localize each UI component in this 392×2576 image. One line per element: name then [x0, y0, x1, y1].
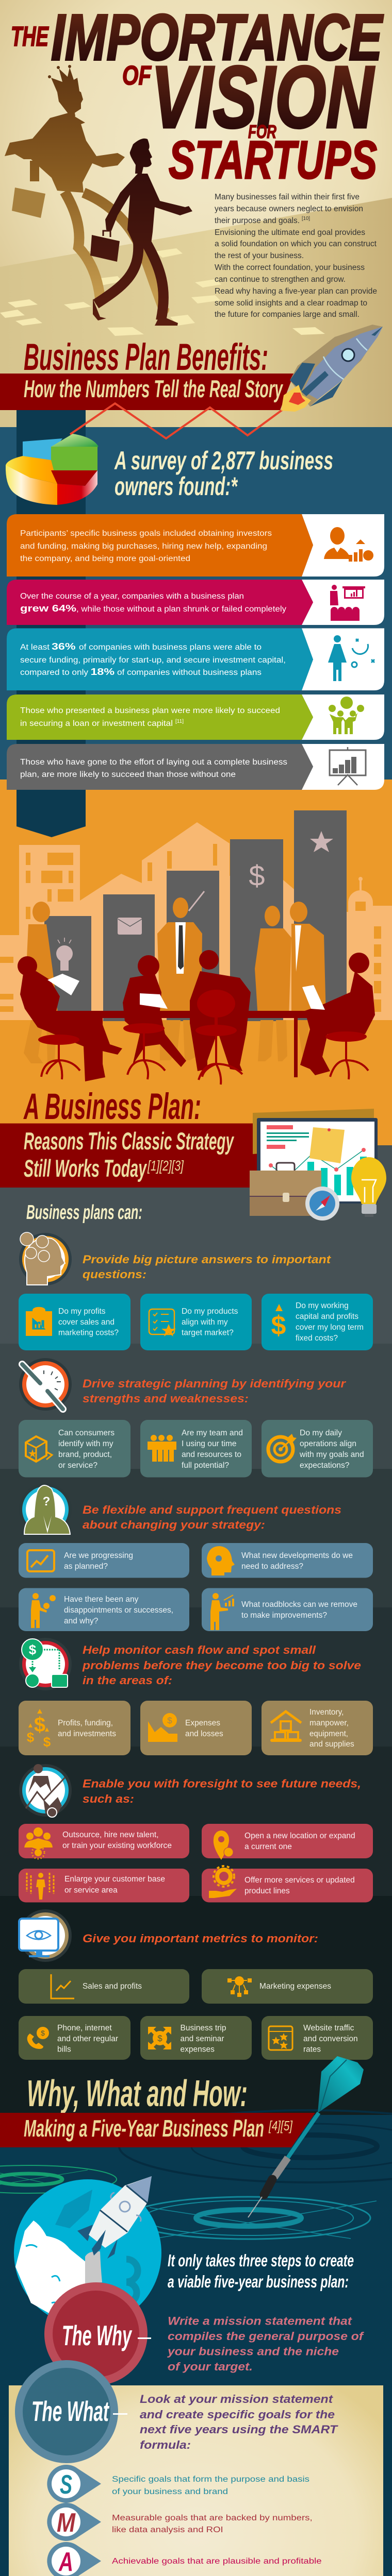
panel: monitor cards: and investments: [58, 1730, 116, 1738]
panel: future needs cards: or train your existing workforce: [62, 1841, 172, 1850]
heading: monitor cash flow: Help monitor cash flow and spot small: [83, 1643, 316, 1656]
panel: metrics cards: and other regular: [57, 2035, 118, 2043]
text block: intro: some solid insights and a clear roadmap to: [215, 299, 367, 308]
panel: question cards row 1: Do my working: [296, 1301, 349, 1310]
illustration: seated team at table: [18, 950, 375, 1084]
heading: big picture answers: questions:: [83, 1268, 146, 1281]
icon: cash flow diagram: $: [29, 1642, 37, 1657]
panel: future needs cards: [19, 1824, 373, 1902]
text: SMART definitions: [112, 2475, 350, 2576]
text block: intro: With the correct foundation, your business: [215, 263, 365, 272]
heading: metrics: Give you important metrics to monitor:: [83, 1932, 318, 1945]
panel: monitor cards: [19, 1701, 373, 1755]
panel: future needs cards: Open a new location or expand: [244, 1832, 355, 1840]
panel: survey finding loans: [7, 694, 384, 740]
panel: metrics cards: bills: [57, 2045, 71, 2054]
chart: gray bars with icons: [44, 810, 347, 1021]
panel: future needs cards: a current one: [244, 1842, 292, 1851]
text block: intro: their purpose and goals.: [215, 216, 300, 225]
panel: monitor cards: and losses: [185, 1730, 223, 1738]
circle: The Why: The Why: [62, 2319, 132, 2351]
heading band: Making a Five-Year Business Plan: [4][5]: [268, 2118, 293, 2133]
heading: Why, What and How: Why, What and How:: [27, 2073, 248, 2114]
text: SMART definitions: like data analysis and ROI: [112, 2526, 223, 2534]
heading: flexible strategy: about changing your strategy:: [83, 1518, 265, 1531]
icon: question-mark woman: [19, 1483, 72, 1536]
panel: question cards row 2: Do my daily: [300, 1429, 342, 1437]
text block: intro: Many businesses fail within their first five: [215, 193, 360, 201]
panel: question cards row 2: Can consumers: [58, 1429, 115, 1437]
panel: future needs cards: product lines: [244, 1887, 290, 1895]
panel: monitor cards: manpower,: [309, 1719, 349, 1727]
text block: the why: your business and the niche: [167, 2345, 339, 2358]
panel: metrics cards: $: [157, 2033, 162, 2043]
panel: survey finding grew 64%: grew 64%: [20, 603, 76, 614]
section background: slate gradient steps: [0, 1145, 392, 2115]
illustration: laptop, briefcase, compass, bulb: [250, 1109, 386, 1221]
panel: question cards row 1: fixed costs?: [296, 1334, 338, 1343]
section background: orange with skyline: [0, 779, 392, 1150]
panel: monitor cards: Expenses: [185, 1719, 220, 1727]
text block: the why: Write a mission statement that: [168, 2314, 353, 2328]
text: smart intro: [140, 2393, 338, 2451]
panel: question cards row 2: with my goals and: [299, 1450, 364, 1459]
icon: cash flow diagram: [19, 1638, 72, 1690]
text block: intro: a solid foundation on which you can construct: [215, 240, 377, 248]
icon: broken chain clock: [19, 1358, 72, 1411]
decor: teal target: [127, 2197, 377, 2239]
text block: the why: [167, 2314, 365, 2373]
text block: intro: the rest of your business.: [215, 251, 304, 260]
text block: intro: the future for companies large and small.: [215, 310, 360, 319]
panel: monitor cards: equipment,: [309, 1730, 348, 1738]
panel: question cards row 3: as planned?: [64, 1562, 108, 1571]
circle: The What: The What: [31, 2395, 110, 2427]
title: The Importance of Vision for Startups: FOR: [248, 121, 276, 142]
panel: survey finding loans: in securing a loan or investment capital: [20, 719, 173, 728]
illustration: globe with rocket: [14, 2176, 161, 2327]
heading: strategic planning: Drive strategic planning by identifying your: [83, 1377, 347, 1390]
panel: question cards row 1: target market?: [182, 1328, 234, 1337]
heading: Business plans can: Business plans can:: [26, 1201, 142, 1224]
heading band: Reasons This Classic Strategy: Still Works Today: [24, 1155, 148, 1182]
panel: survey finding 36% funding: 18%: [91, 667, 115, 677]
panel: question cards row 2: Are my team and: [182, 1429, 243, 1437]
decor: dark target: [119, 2110, 392, 2182]
panel: question cards row 3: What roadblocks can we remove: [241, 1600, 357, 1609]
icon: head with puzzle: [19, 1232, 72, 1285]
text: SMART definitions: Measurable goals that are backed by numbers,: [112, 2514, 313, 2522]
text block: intro: years because owners neglect to envision: [215, 205, 363, 213]
heading: big picture answers: [83, 1253, 332, 1281]
panel: question cards row 3: What new developments do we: [241, 1551, 353, 1560]
heading: foresight: Enable you with foresight to see future needs,: [83, 1777, 361, 1790]
panel: survey finding 36% funding: of companies with business plans were able to: [79, 643, 262, 652]
panel: question cards row 2: and resources to: [182, 1450, 241, 1459]
illustration: king shadow silhouette: [5, 65, 164, 310]
circle: The What: [15, 2360, 127, 2463]
panel: survey finding complete plan: Those who have gone to the effort of laying out a complete business: [20, 758, 287, 767]
panel: metrics cards: and conversion: [303, 2035, 358, 2043]
panel: future needs cards: Offer more services or updated: [244, 1876, 355, 1885]
heading band: Reasons This Classic Strategy: [0, 1123, 258, 1188]
illustration: dart: [248, 2056, 364, 2217]
heading: strategic planning: [83, 1377, 347, 1405]
panel: metrics cards: Business trip: [181, 2024, 226, 2032]
panel: survey finding complete plan: [7, 744, 384, 790]
panel: monitor cards: $: [27, 1730, 35, 1745]
panel: question cards row 3: to make improvements?: [241, 1611, 327, 1620]
panel: metrics cards: $: [41, 2029, 45, 2037]
panel: survey finding 36% funding: At least: [20, 643, 50, 652]
text: SMART definitions: Specific goals that form the purpose and basis: [112, 2475, 309, 2484]
panel: future needs cards: Outsource, hire new talent,: [62, 1831, 159, 1839]
panel: question cards row 1: capital and profits: [296, 1312, 358, 1321]
panel: metrics cards: Marketing expenses: [259, 1982, 331, 1991]
panel: question cards row 2: expectations?: [300, 1461, 350, 1470]
panel: metrics cards: [19, 1969, 373, 2060]
heading band: How the Numbers Tell the Real Story: [0, 374, 294, 410]
panel: question cards row 3: need to address?: [241, 1562, 303, 1571]
panel: survey finding complete plan: plan, are more likely to succeed than those without one: [20, 770, 236, 779]
panel: question cards row 2: I using our time: [182, 1439, 237, 1448]
panel: metrics cards: Website traffic: [303, 2024, 354, 2032]
panel: question cards row 2: or service?: [58, 1461, 97, 1470]
heading: A Business Plan: A Business Plan:: [23, 1087, 201, 1127]
heading: flexible strategy: [83, 1503, 341, 1531]
text block: the why: compiles the general purpose of: [168, 2330, 365, 2343]
ribbon behind survey bands: [17, 410, 86, 837]
panel: question cards row 3: [19, 1543, 373, 1631]
panel: survey finding goals: [7, 514, 384, 577]
heading: survey: owners found:*: [115, 472, 238, 501]
text: smart intro: next five years using the SMART: [140, 2423, 338, 2436]
panel: survey finding 36% funding: 36%: [52, 641, 75, 652]
heading: monitor cash flow: in the areas of:: [83, 1674, 172, 1687]
text block: intro: Read why having a five-year plan can provide: [215, 287, 377, 296]
panel: survey finding 36% funding: compared to only: [20, 668, 88, 677]
panel: question cards row 3: and why?: [64, 1617, 99, 1625]
panel: survey finding 36% funding: of companies without business plans: [117, 668, 262, 677]
heading band: Reasons This Classic Strategy: [1][2][3]: [147, 1158, 184, 1174]
panel: question cards row 2: identify with my: [58, 1439, 113, 1448]
panel: monitor cards: $: [43, 1734, 51, 1750]
text block: intro: [215, 193, 377, 319]
text: SMART definitions: of your business and brand: [112, 2487, 228, 2496]
panel: survey finding 36% funding: secure funding, primarily for start-up, and secure investment capital,: [20, 656, 286, 665]
heading: foresight: [83, 1777, 361, 1805]
section background: hero tan: [0, 0, 392, 427]
text: SMART definitions: Achievable goals that are plausible and profitable: [112, 2557, 322, 2566]
heading: survey: [114, 446, 333, 501]
illustration: businessman silhouette: [90, 139, 192, 326]
illustration: standing team: [24, 897, 326, 1063]
panel: the what: [9, 2360, 383, 2576]
panel: question cards row 2: operations align: [300, 1439, 356, 1448]
section background: dark teal: [0, 2115, 392, 2576]
panel: question cards row 1: marketing costs?: [58, 1328, 119, 1337]
panel: metrics cards: rates: [303, 2045, 321, 2054]
text: smart intro: formula:: [140, 2438, 191, 2451]
chart: 3D pie: [6, 434, 99, 505]
panel: survey finding grew 64%: Over the course of a year, companies with a business plan: [20, 592, 244, 601]
panel: question cards row 2: full potential?: [182, 1461, 229, 1470]
panel: question cards row 3: disappointments or successes,: [64, 1606, 173, 1615]
panel: survey finding grew 64%: [7, 580, 384, 625]
panel: metrics cards: Phone, internet: [57, 2024, 112, 2032]
panel: question cards row 1: Do my products: [182, 1307, 238, 1316]
panel: question cards row 1: cover my long term: [296, 1323, 364, 1332]
text: smart intro: Look at your mission statement: [140, 2393, 334, 2405]
panel: survey finding goals: the company, and being more goal-oriented: [20, 554, 190, 563]
heading: flexible strategy: Be flexible and support frequent questions: [83, 1503, 341, 1516]
panel: question cards row 2: [19, 1420, 373, 1478]
heading: monitor cash flow: [82, 1643, 361, 1687]
icon: question-mark woman: ?: [43, 1495, 50, 1509]
panel: monitor cards: Inventory,: [309, 1708, 344, 1717]
heading: foresight: such as:: [83, 1792, 134, 1805]
panel: survey finding goals: Participants’ specific business goals included obtaining investors: [20, 529, 272, 538]
circle: The Why: [44, 2282, 151, 2385]
heading: monitor cash flow: problems before they become too big to solve: [82, 1659, 361, 1672]
panel: survey finding 36% funding: [7, 629, 384, 690]
text: smart intro: and create specific goals for the: [140, 2408, 335, 2421]
text block: the why: of your target.: [168, 2360, 253, 2373]
heading: big picture answers: Provide big picture answers to important: [83, 1253, 332, 1266]
title: The Importance of Vision for Startups: THE: [11, 21, 49, 52]
panel: monitor cards: $: [34, 1714, 45, 1736]
panel: question cards row 2: brand, product,: [58, 1450, 112, 1459]
pins: SMART letters: [47, 2465, 101, 2576]
panel: future needs cards: or service area: [64, 1886, 118, 1895]
title: The Importance of Vision for Startups: OF: [122, 61, 152, 91]
panel: metrics cards: and seminar: [181, 2035, 224, 2043]
chart line up to rocket: [70, 403, 283, 438]
icon: foresight figure: [19, 1764, 72, 1817]
title: The Importance of Vision for Startups: [11, 1, 384, 190]
heading band: Making a Five-Year Business Plan: [0, 2113, 315, 2147]
panel: question cards row 3: Are we progressing: [64, 1551, 133, 1560]
text block: intro: [10]: [302, 216, 310, 222]
text block: intro: can continue to strengthen and grow.: [215, 275, 346, 284]
panel: question cards row 1: [19, 1294, 373, 1350]
panel: survey finding loans: Those who presented a business plan were more likely to succeed: [20, 706, 280, 715]
chart: gray bars with icons: $: [249, 859, 265, 892]
section background: survey blue: [0, 427, 392, 788]
heading: strategic planning: strengths and weaknesses:: [83, 1392, 249, 1405]
panel: survey finding loans: [11]: [175, 719, 184, 724]
panel: metrics cards: Sales and profits: [83, 1982, 142, 1991]
panel: question cards row 1: cover sales and: [58, 1318, 115, 1327]
panel: question cards row 1: Do my profits: [58, 1307, 106, 1316]
panel: monitor cards: and supplies: [309, 1740, 354, 1749]
pins: SMART letters: M: [57, 2508, 76, 2538]
text block: intro: Envisioning the ultimate end goal provides: [215, 228, 365, 237]
pins: SMART letters: S: [60, 2470, 72, 2500]
panel: metrics cards: expenses: [181, 2045, 215, 2054]
panel: monitor cards: $: [167, 1716, 172, 1725]
panel: survey finding goals: and funding, making big purchases, hiring new help, expanding: [20, 542, 267, 551]
text block: three steps: [168, 2251, 354, 2291]
decor: green target: [0, 2165, 117, 2193]
heading band: Reasons This Classic Strategy: Reasons This Classic Strategy: [24, 1127, 235, 1155]
panel: question cards row 3: Have there been any: [64, 1595, 139, 1604]
icon: rocket: [281, 325, 383, 412]
icon: monitor with eye: [19, 1909, 72, 1962]
panel: survey finding grew 64%: , while those without a plan shrunk or failed completely: [76, 605, 286, 614]
panel: monitor cards: Profits, funding,: [58, 1719, 113, 1727]
panel: question cards row 1: align with my: [182, 1318, 228, 1327]
panel: question cards row 1: $: [271, 1311, 286, 1341]
panel: future needs cards: Enlarge your customer base: [64, 1875, 165, 1884]
